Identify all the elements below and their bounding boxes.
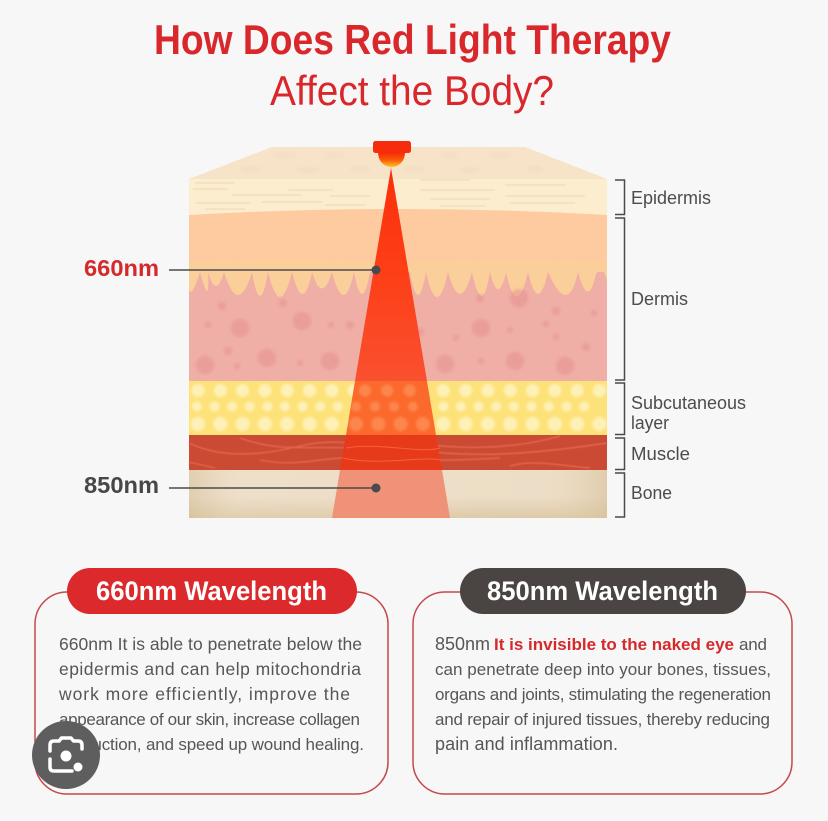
panel: 850nm wavelength <box>413 568 792 794</box>
body text: 660nm: epidermis and can help mitochondria <box>59 659 361 679</box>
850nm label and pointer: 850nm <box>84 472 159 498</box>
title: Affect the Body? <box>270 67 554 114</box>
epidermis layer <box>189 179 607 216</box>
660nm label and pointer <box>84 255 380 281</box>
layer labels: Epidermis <box>631 188 711 208</box>
dermis lower layer <box>189 260 607 381</box>
bone layer <box>189 470 607 518</box>
skin surface top face <box>189 147 607 179</box>
heading pill: 660nm: 660nm Wavelength <box>96 576 327 606</box>
panel: 660nm wavelength <box>35 568 388 794</box>
layer labels: Bone <box>631 483 672 503</box>
layer labels <box>631 188 746 503</box>
body text: 660nm <box>58 634 364 754</box>
red light device <box>373 141 411 167</box>
layer labels: Dermis <box>631 289 688 309</box>
body text: 850nm: and repair of injured tissues, thereby reducing <box>435 710 770 729</box>
muscle layer <box>189 435 607 470</box>
title <box>154 16 672 114</box>
body text: 850nm <box>435 634 771 754</box>
660nm label and pointer: 660nm <box>84 255 159 281</box>
title: How Does Red Light Therapy <box>154 16 672 63</box>
icon: image search camera badge <box>32 721 100 789</box>
body text: 850nm: organs and joints, stimulating the regeneration <box>435 685 771 704</box>
body text: 660nm: appearance of our skin, increase collagen <box>59 710 360 729</box>
850nm label and pointer <box>84 472 380 498</box>
heading pill: 660nm <box>67 568 357 614</box>
dermis upper layer <box>189 209 607 300</box>
layer labels: Subcutaneous <box>631 393 746 413</box>
body text: 850nm: 850nm <box>435 634 490 654</box>
layer labels: layer <box>631 413 669 433</box>
body text: 660nm: 660nm It is able to penetrate below the <box>59 634 362 654</box>
body text: 660nm: production, and speed up wound healing. <box>59 735 364 754</box>
layer brackets <box>615 180 624 517</box>
light beam <box>332 168 450 518</box>
heading pill: 850nm: 850nm Wavelength <box>487 576 718 606</box>
layer labels: Muscle <box>631 444 690 464</box>
dermal ridges <box>189 260 607 297</box>
skin cross-section diagram <box>189 141 607 518</box>
dermis cells <box>196 289 597 375</box>
body text: 660nm: work more efficiently, improve the <box>58 684 350 704</box>
heading pill: 850nm <box>460 568 746 614</box>
body text: 850nm: It is invisible to the naked eye <box>494 635 734 654</box>
subcutaneous fat layer <box>189 381 607 435</box>
body text: 850nm: and <box>739 635 767 654</box>
body text: 850nm: pain and inflammation. <box>435 734 618 754</box>
body text: 850nm: can penetrate deep into your bones, tissues, <box>435 660 771 679</box>
